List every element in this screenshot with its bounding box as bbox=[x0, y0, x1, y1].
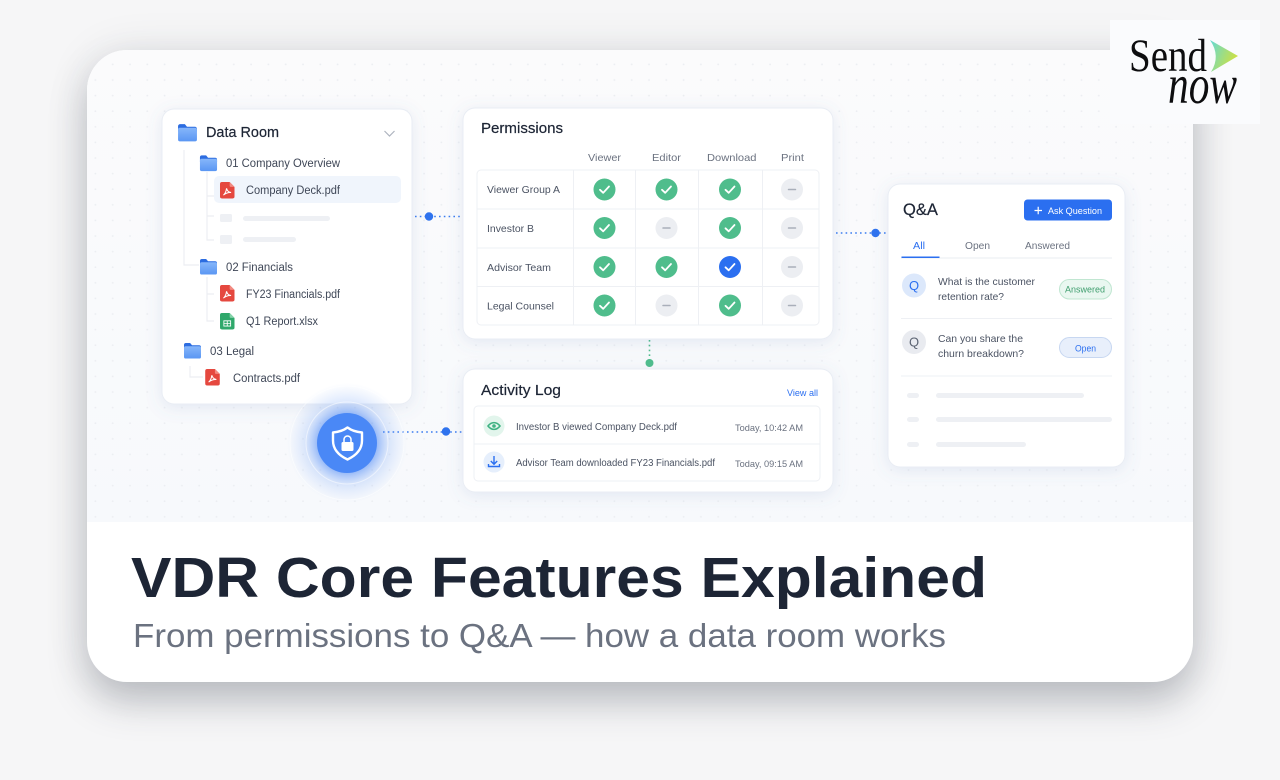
tabs bbox=[901, 240, 1112, 258]
panel: permissions bbox=[463, 108, 833, 339]
log row: viewed: Investor B viewed Company Deck.pdf bbox=[516, 422, 677, 433]
panel: data room bbox=[162, 109, 412, 404]
log row: downloaded: Today, 09:15 AM bbox=[735, 459, 803, 470]
question 2: churn breakdown? bbox=[938, 348, 1024, 360]
column headers: Download bbox=[707, 152, 757, 164]
log table bbox=[474, 406, 820, 481]
file row: contracts bbox=[205, 369, 301, 386]
column headers: Editor bbox=[652, 152, 682, 164]
log row: downloaded bbox=[484, 452, 803, 472]
tree lines bbox=[184, 150, 214, 377]
row labels: Advisor Team bbox=[487, 262, 551, 274]
icon: security shield bbox=[287, 383, 407, 503]
question 2: Q bbox=[909, 334, 919, 350]
main card upper area bbox=[87, 50, 1193, 522]
folder: 02 financials: 02 Financials bbox=[226, 262, 293, 274]
placeholder row 1 bbox=[220, 214, 330, 222]
question 2: Can you share the bbox=[938, 333, 1023, 345]
file row: FY23 financials: FY23 Financials.pdf bbox=[246, 289, 341, 301]
file row: company deck: Company Deck.pdf bbox=[246, 185, 341, 197]
log row: viewed: Today, 10:42 AM bbox=[735, 423, 803, 434]
table grid bbox=[477, 170, 819, 325]
main card shadow bbox=[87, 50, 1193, 682]
connector: permissions to Q&A bbox=[836, 229, 888, 237]
placeholder row 2 bbox=[220, 235, 296, 244]
heading: activity log: Activity Log bbox=[481, 383, 561, 399]
column headers: Viewer bbox=[588, 152, 622, 164]
heading: permissions: Permissions bbox=[481, 121, 563, 137]
logo: Send now bbox=[1110, 20, 1260, 124]
file row: Q1 report bbox=[220, 313, 318, 329]
panel: activity log bbox=[463, 369, 833, 492]
question 1: Q bbox=[909, 278, 919, 293]
connector: data room to permissions bbox=[415, 212, 463, 221]
tabs: Open bbox=[965, 240, 990, 252]
file row: Q1 report: Q1 Report.xlsx bbox=[246, 316, 318, 328]
tabs: All bbox=[913, 240, 925, 252]
row labels: Investor B bbox=[487, 223, 534, 235]
folder: 01 company overview bbox=[200, 155, 341, 171]
question 2 bbox=[902, 330, 1112, 360]
question 1 bbox=[902, 274, 1112, 303]
log row: downloaded: Advisor Team downloaded FY23 Financials.pdf bbox=[516, 458, 715, 469]
folder: 02 financials bbox=[200, 259, 293, 275]
question 1: Answered bbox=[1065, 284, 1105, 294]
panel: Q&A bbox=[888, 184, 1125, 467]
row labels: Legal Counsel bbox=[487, 300, 554, 312]
question 1: What is the customer bbox=[938, 276, 1035, 288]
logo: Send now: now bbox=[1168, 54, 1237, 115]
connector: security shield to activity log bbox=[383, 427, 463, 436]
folder: 03 legal: 03 Legal bbox=[210, 346, 254, 358]
heading: Q&A: Q&A bbox=[903, 201, 938, 219]
placeholder rows bbox=[907, 393, 1112, 447]
logo: Send now: Send bbox=[1129, 30, 1207, 82]
heading: data room: Data Room bbox=[206, 125, 279, 141]
row labels bbox=[487, 184, 560, 312]
column headers: Print bbox=[781, 152, 804, 164]
folder: 01 company overview: 01 Company Overview bbox=[226, 158, 341, 170]
question 2: Open bbox=[1075, 344, 1096, 354]
button: ask question bbox=[1024, 200, 1112, 220]
log row: viewed bbox=[484, 416, 803, 436]
title: VDR Core Features Explained bbox=[131, 546, 987, 610]
row labels: Viewer Group A bbox=[487, 184, 560, 196]
button: ask question: Ask Question bbox=[1048, 206, 1102, 217]
icon: chevron bbox=[384, 131, 394, 136]
folder: 03 legal bbox=[184, 343, 254, 359]
column headers bbox=[588, 152, 804, 164]
connector: permissions to activity log bbox=[646, 340, 654, 367]
question 1: retention rate? bbox=[938, 291, 1004, 303]
subtitle: From permissions to Q&A — how a data room works bbox=[133, 617, 946, 654]
file row: FY23 financials bbox=[220, 285, 341, 301]
link: view all: View all bbox=[787, 388, 818, 398]
permission status marks bbox=[594, 178, 803, 316]
file row: contracts: Contracts.pdf bbox=[233, 373, 301, 385]
file row: company deck bbox=[214, 176, 401, 203]
tabs: Answered bbox=[1025, 240, 1070, 252]
icon: data room folder bbox=[178, 124, 197, 141]
